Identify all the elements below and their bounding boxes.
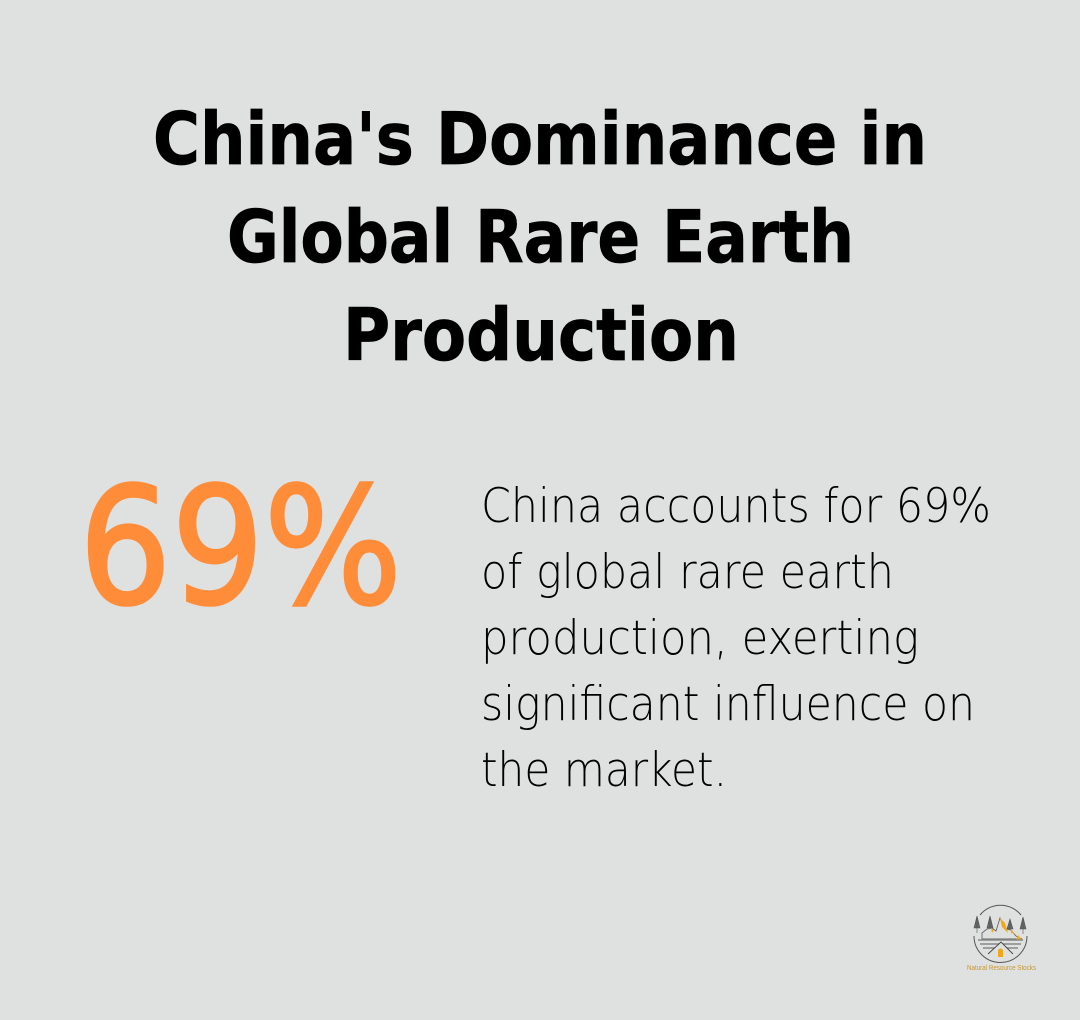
- description text: the market.: [481, 743, 727, 798]
- description text: [481, 479, 991, 798]
- description text: China accounts for 69%: [481, 479, 991, 534]
- logo wordmark: Natural Resource Stocks: [967, 965, 1036, 972]
- logo cabin door: [998, 948, 1003, 957]
- logo water lines: [978, 940, 1023, 948]
- logo trees: [974, 916, 1026, 934]
- description text: significant influence on: [481, 677, 975, 732]
- logo: Natural Resource Stocks: [967, 905, 1036, 972]
- logo mountains: [982, 918, 1022, 939]
- title: China's Dominance in: [153, 97, 927, 181]
- title: Production: [343, 293, 739, 377]
- big statistic: 69%: 69%: [79, 454, 402, 642]
- description text: production, exerting: [481, 611, 919, 666]
- logo cabin: [988, 942, 1013, 954]
- logo ring: [974, 905, 1027, 962]
- title: [153, 97, 927, 377]
- description text: of global rare earth: [481, 545, 894, 600]
- title: Global Rare Earth: [227, 195, 854, 279]
